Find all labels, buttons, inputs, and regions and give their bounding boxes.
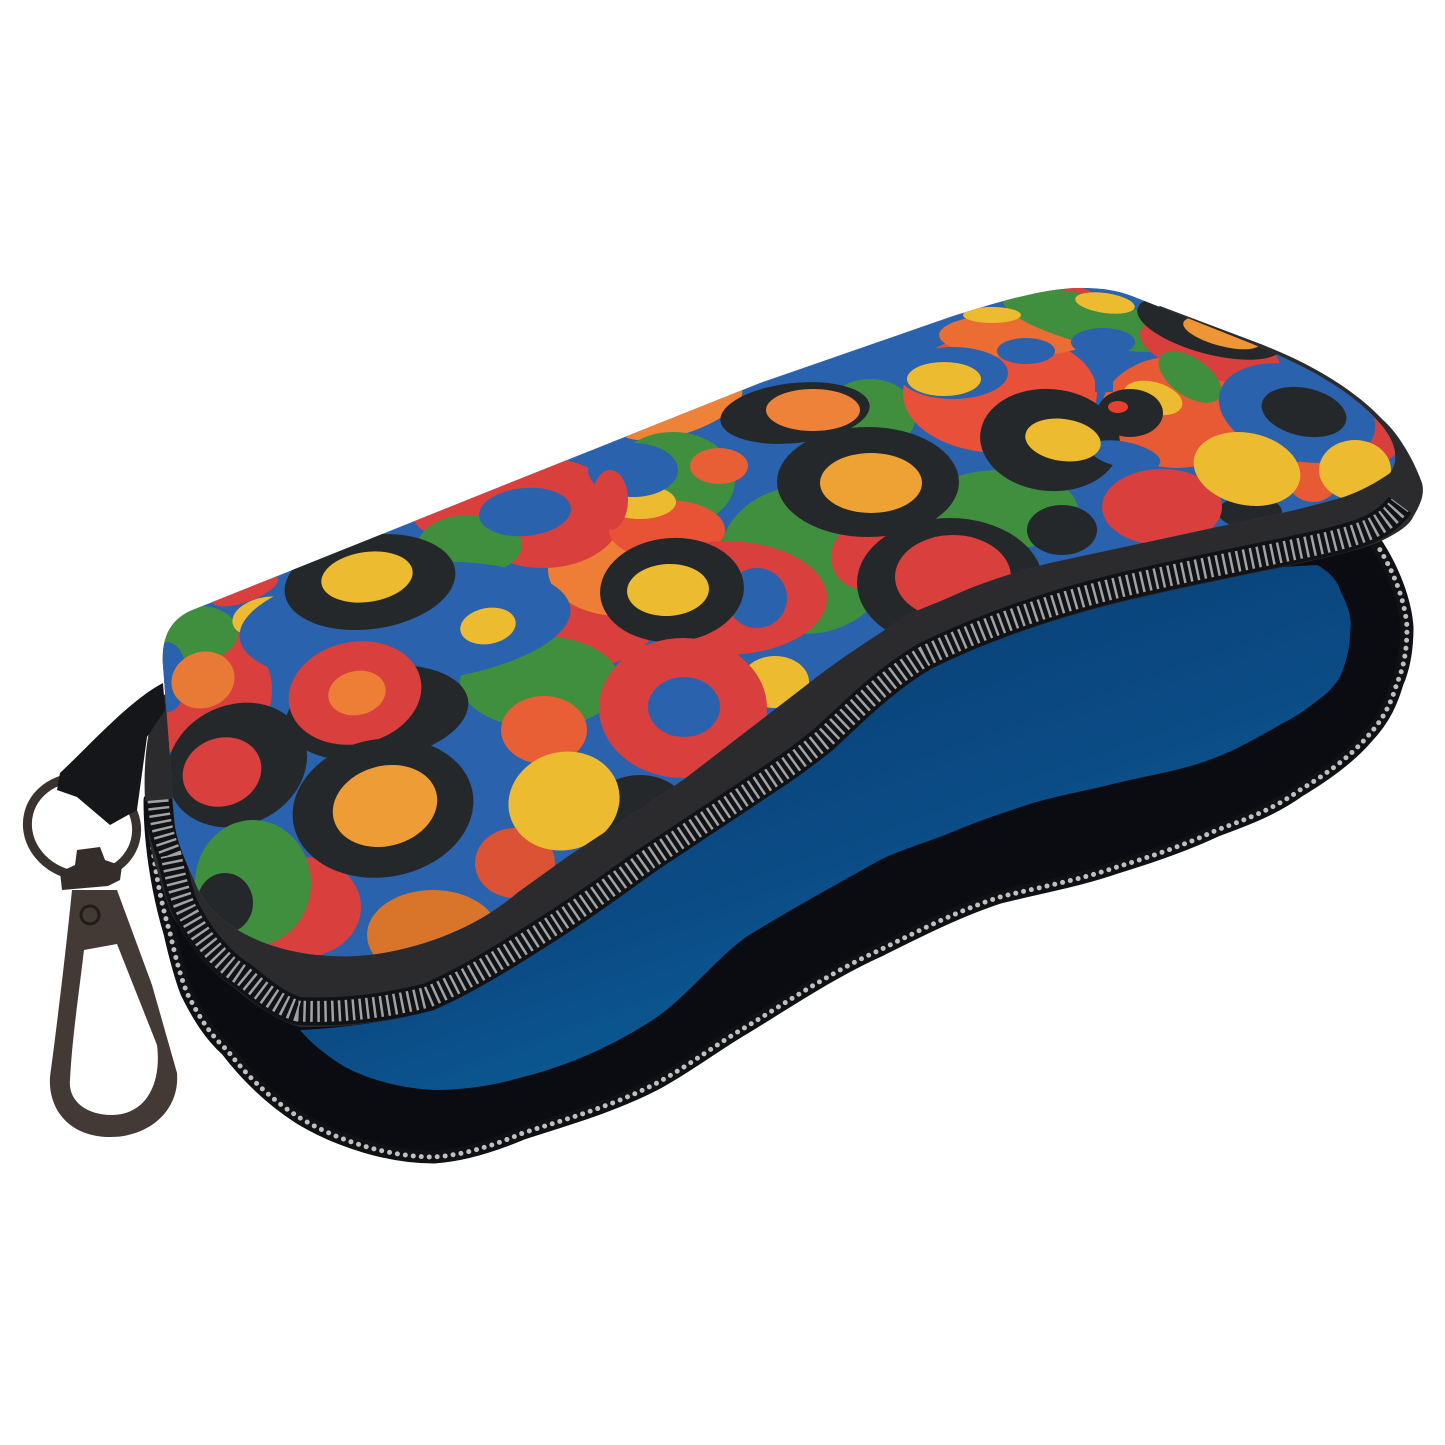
pattern flap [162, 288, 1396, 956]
left cluster of rings [162, 488, 674, 956]
zipper pull tab [57, 683, 165, 825]
product illustration: zip case [22, 288, 1423, 1164]
interior: blue lining [300, 565, 1351, 1090]
hook body [50, 890, 177, 1137]
centre rings [597, 375, 1097, 778]
lower shell: black lining [150, 520, 1407, 1157]
swivel block [60, 847, 122, 890]
upper zipper tape [145, 306, 1423, 1027]
metal clasp [50, 847, 177, 1137]
background colour blobs [128, 275, 1406, 758]
lower zipper teeth [150, 545, 1407, 1157]
right rings [980, 301, 1391, 506]
rivet [81, 906, 99, 924]
metal ring [16, 765, 148, 889]
upper zipper teeth [158, 505, 1400, 1011]
